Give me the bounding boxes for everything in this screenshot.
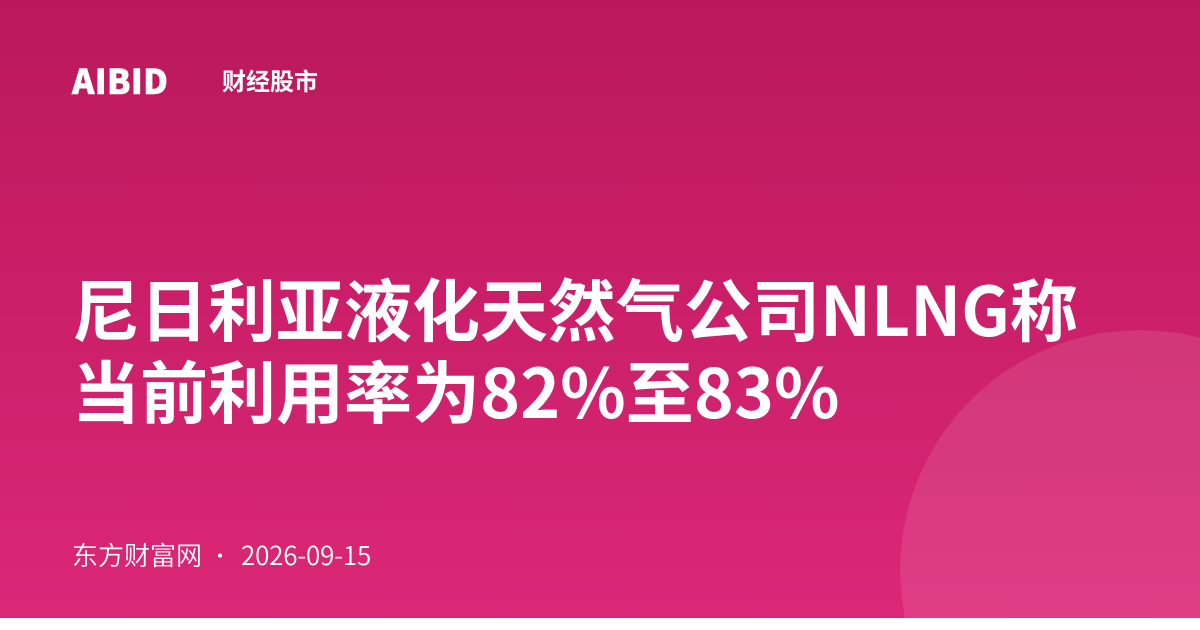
source and date (72, 536, 371, 573)
title (72, 257, 1078, 438)
title: 尼日利亚液化天然气公司NLNG称 (72, 257, 1078, 356)
source and date: · (209, 539, 231, 571)
source and date: 东方财富网 (72, 536, 202, 573)
source and date: 2026-09-15 (241, 536, 371, 573)
decorative translucent circle (900, 330, 1200, 618)
title: 当前利用率为82%至83% (72, 339, 839, 438)
section label: 财经股市 (222, 62, 318, 97)
brand name: AIBID (72, 55, 168, 104)
